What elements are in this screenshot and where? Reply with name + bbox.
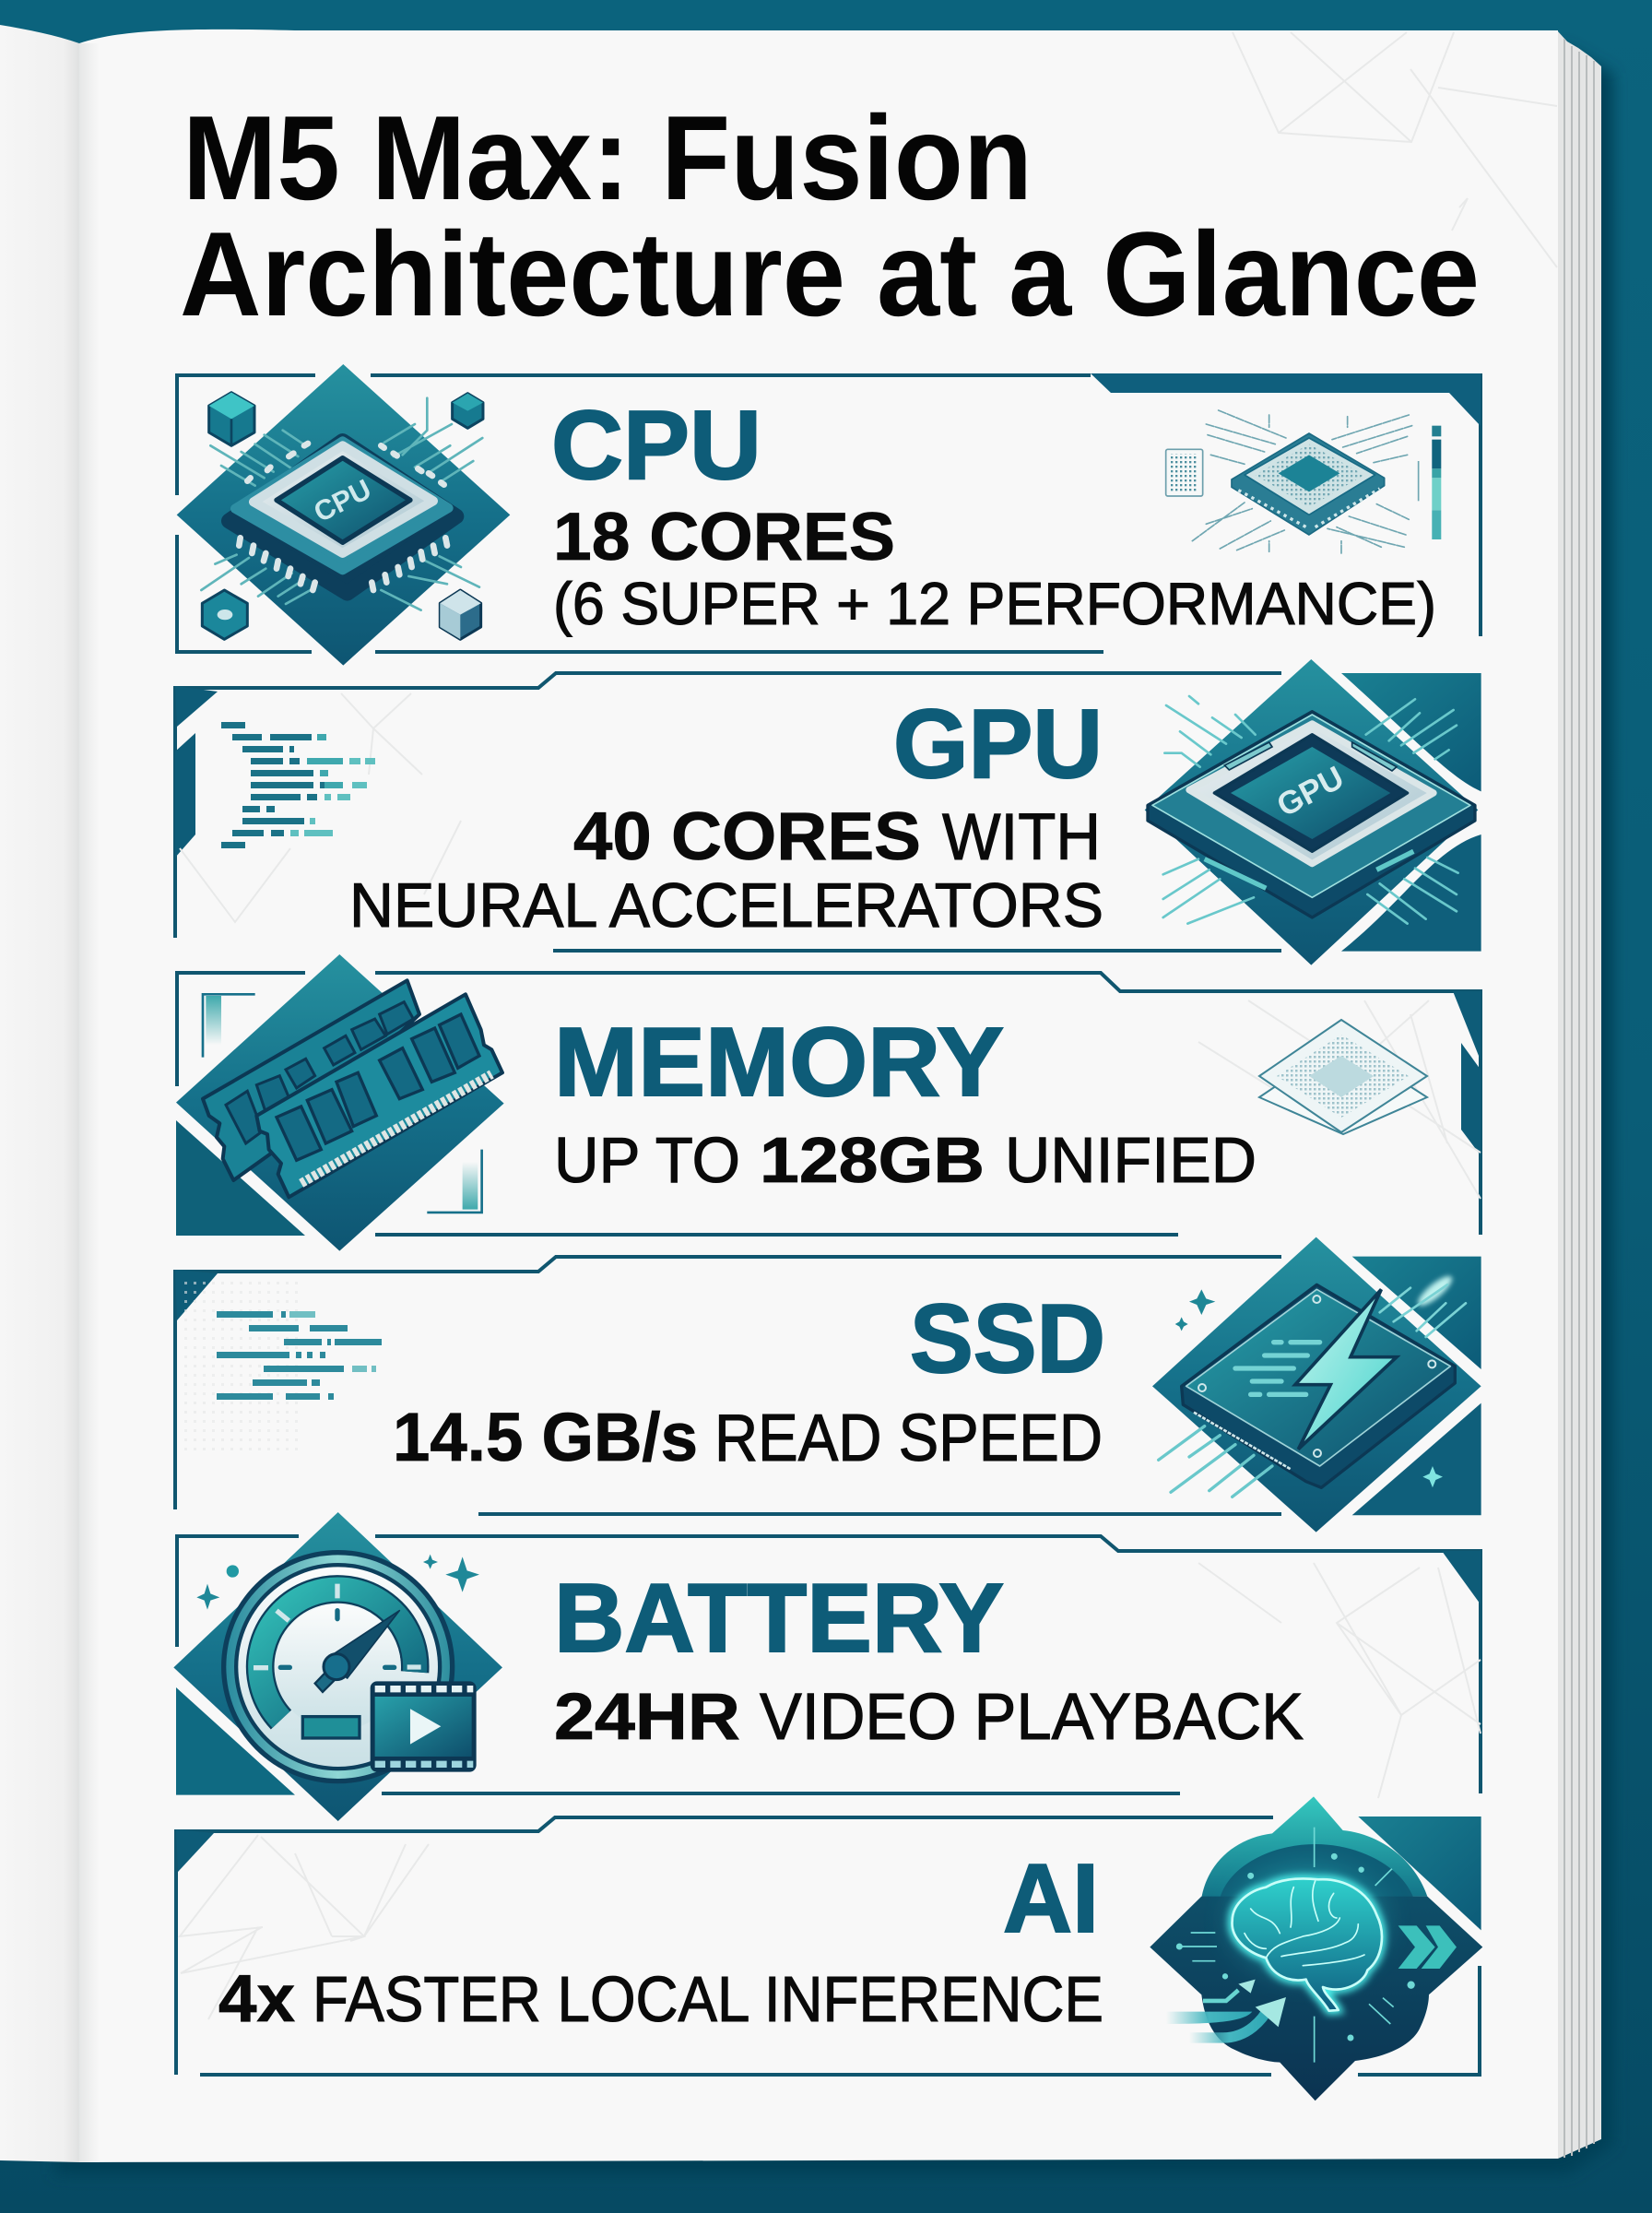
corner accent [176, 1829, 214, 1872]
panel: SSD [175, 1237, 1481, 1533]
left page [0, 25, 79, 2162]
RAM stick front [256, 994, 502, 1197]
corner accent [175, 1270, 218, 1320]
light streaks [1159, 1272, 1466, 1497]
heading: battery: BATTERY [554, 1564, 1004, 1673]
needle [315, 1611, 399, 1692]
title [180, 90, 1480, 341]
background lines [180, 1835, 429, 2019]
panel: battery [173, 1512, 1481, 1821]
brain glow outline [1233, 1878, 1382, 2011]
chip label: CPU [309, 473, 376, 528]
stat: 128GB unified: 128GB [760, 1124, 985, 1196]
icon: CPU chip [177, 364, 510, 666]
panel frame [175, 1257, 1281, 1514]
panel: AI [176, 1796, 1482, 2101]
code lines [221, 722, 375, 848]
stat: 128GB unified: UNIFIED [1005, 1124, 1257, 1196]
background lines [180, 693, 461, 922]
panel frame [177, 373, 1481, 652]
stat: read speed: 14.5 GB/s [393, 1399, 698, 1475]
background lines [1198, 1563, 1481, 1798]
gauge inner marks [280, 1611, 395, 1667]
panel frame [177, 973, 1481, 1235]
drive top [1186, 1289, 1450, 1466]
gauge ticks [254, 1584, 421, 1668]
stat: local inference: FASTER LOCAL INFERENCE [313, 1963, 1103, 2035]
stat: 40 cores with: 40 CORES [573, 799, 921, 874]
background lines [1198, 1000, 1481, 1199]
stat: 18 cores: 18 CORES [553, 500, 895, 574]
bottom-left triangle [176, 1120, 305, 1236]
icon: AI brain [1150, 1796, 1482, 2101]
inner die [1214, 735, 1408, 851]
chip top plate [1152, 715, 1470, 897]
drive body [1182, 1284, 1455, 1487]
heading: SSD: SSD [910, 1284, 1105, 1393]
chip label: GPU [1271, 760, 1350, 824]
upper teal shield [1201, 1796, 1427, 1898]
indicator lines and dots [1177, 1828, 1414, 2063]
RAM stick back [203, 980, 419, 1180]
bracket bottom-right [427, 1150, 482, 1213]
stat: 128GB unified: UP TO [554, 1124, 740, 1196]
chip body [229, 441, 456, 593]
heading: AI: AI [1003, 1844, 1099, 1953]
corner accent [1091, 373, 1481, 426]
cube top-left [209, 393, 254, 445]
sparkles [1175, 1289, 1215, 1331]
panel frame [177, 1536, 1481, 1793]
page background geometric lines [1233, 32, 1557, 267]
bright edge [1205, 851, 1413, 888]
corner accents [1453, 991, 1481, 1155]
lower dark shield [1150, 1897, 1482, 2101]
motion arrows [1166, 1980, 1286, 2038]
lightning bolt [1295, 1289, 1397, 1450]
code lines [217, 1311, 382, 1400]
page stack [1557, 30, 1601, 2159]
glow [1233, 1869, 1381, 1973]
cube top-right [453, 394, 483, 428]
brain [1233, 1878, 1382, 2011]
sparkles [196, 1555, 479, 1610]
corner accent [1442, 1551, 1481, 1604]
icon: SSD drive [1152, 1237, 1481, 1533]
port [1194, 1413, 1291, 1469]
chip outline illustration [1259, 1020, 1427, 1134]
chip base [1148, 712, 1475, 917]
stat: 128GB unified [554, 1124, 1257, 1196]
heading: GPU: GPU [893, 690, 1103, 799]
dial [221, 1550, 454, 1783]
panel frame [175, 673, 1281, 951]
inner dome [1220, 1844, 1413, 1898]
right chip illustration [1166, 410, 1419, 553]
stat: video playback: 24HR [554, 1681, 740, 1754]
detail: neural accelerators: NEURAL ACCELERATORS [349, 870, 1103, 941]
corner accents [175, 686, 218, 858]
pins [239, 444, 447, 590]
stat: read speed: READ SPEED [714, 1402, 1103, 1475]
panel: memory [176, 954, 1481, 1251]
title line 1: M5 Max: Fusion [183, 90, 1032, 225]
metal ring [1189, 724, 1434, 864]
heading: memory: MEMORY [554, 1008, 1004, 1117]
data lines [1235, 1343, 1320, 1394]
panel: GPU [175, 659, 1481, 965]
progress bar [1432, 426, 1441, 539]
dot pattern [183, 1277, 302, 1457]
hexagon bottom-left [202, 590, 247, 639]
panel frame [176, 1817, 1480, 2075]
stat: read speed [393, 1399, 1103, 1475]
title line 2: Architecture at a Glance [180, 207, 1480, 341]
heading: CPU: CPU [551, 391, 761, 500]
digital readout [302, 1717, 360, 1738]
chevrons [1398, 1925, 1457, 1969]
bracket top-left [203, 994, 255, 1058]
panel: CPU [177, 364, 1481, 666]
stat: 40 cores with: WITH [942, 801, 1101, 874]
stat: video playback: VIDEO PLAYBACK [760, 1681, 1304, 1754]
spine shadow [79, 43, 100, 2162]
screw holes [1198, 1296, 1435, 1457]
icon: gauge and video [173, 1512, 502, 1821]
video icon [371, 1681, 477, 1772]
cube bottom-right [440, 590, 481, 639]
stat: 40 cores with [573, 799, 1101, 874]
icon: GPU chip [1145, 659, 1481, 965]
icon: RAM modules [176, 954, 504, 1251]
detail: core split: (6 SUPER + 12 PERFORMANCE) [553, 570, 1436, 637]
stat: local inference: 4x [218, 1962, 295, 2036]
